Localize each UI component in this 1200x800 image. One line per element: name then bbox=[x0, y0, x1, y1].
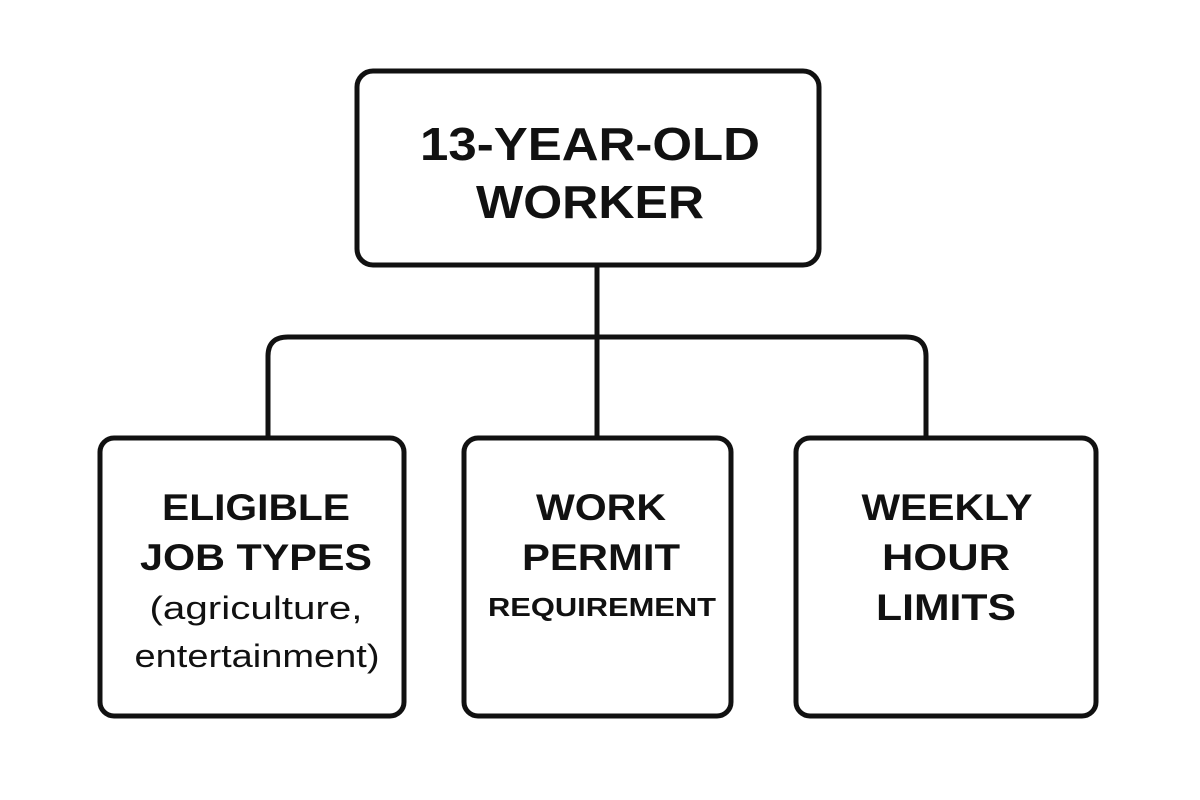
box: weekly hour limits: HOUR bbox=[882, 537, 1010, 578]
top box: 13-year-old worker bbox=[357, 71, 819, 265]
box: eligible job types: entertainment) bbox=[134, 638, 380, 674]
box: work permit requirement: PERMIT bbox=[522, 537, 680, 578]
box: weekly hour limits bbox=[796, 438, 1096, 716]
top box: 13-year-old worker: WORKER bbox=[476, 176, 704, 228]
box: eligible job types: JOB TYPES bbox=[140, 537, 372, 578]
box: weekly hour limits: LIMITS bbox=[876, 587, 1016, 628]
box: weekly hour limits: WEEKLY bbox=[862, 487, 1033, 528]
connector lines bbox=[268, 266, 926, 437]
top box: 13-year-old worker: 13-YEAR-OLD bbox=[420, 118, 760, 170]
box: eligible job types: ELIGIBLE bbox=[162, 487, 350, 528]
box: work permit requirement bbox=[464, 438, 731, 716]
box: work permit requirement: WORK bbox=[536, 487, 666, 528]
box: eligible job types bbox=[100, 438, 404, 716]
box: eligible job types: (agriculture, bbox=[150, 590, 362, 626]
box: work permit requirement: REQUIREMENT bbox=[488, 592, 716, 622]
